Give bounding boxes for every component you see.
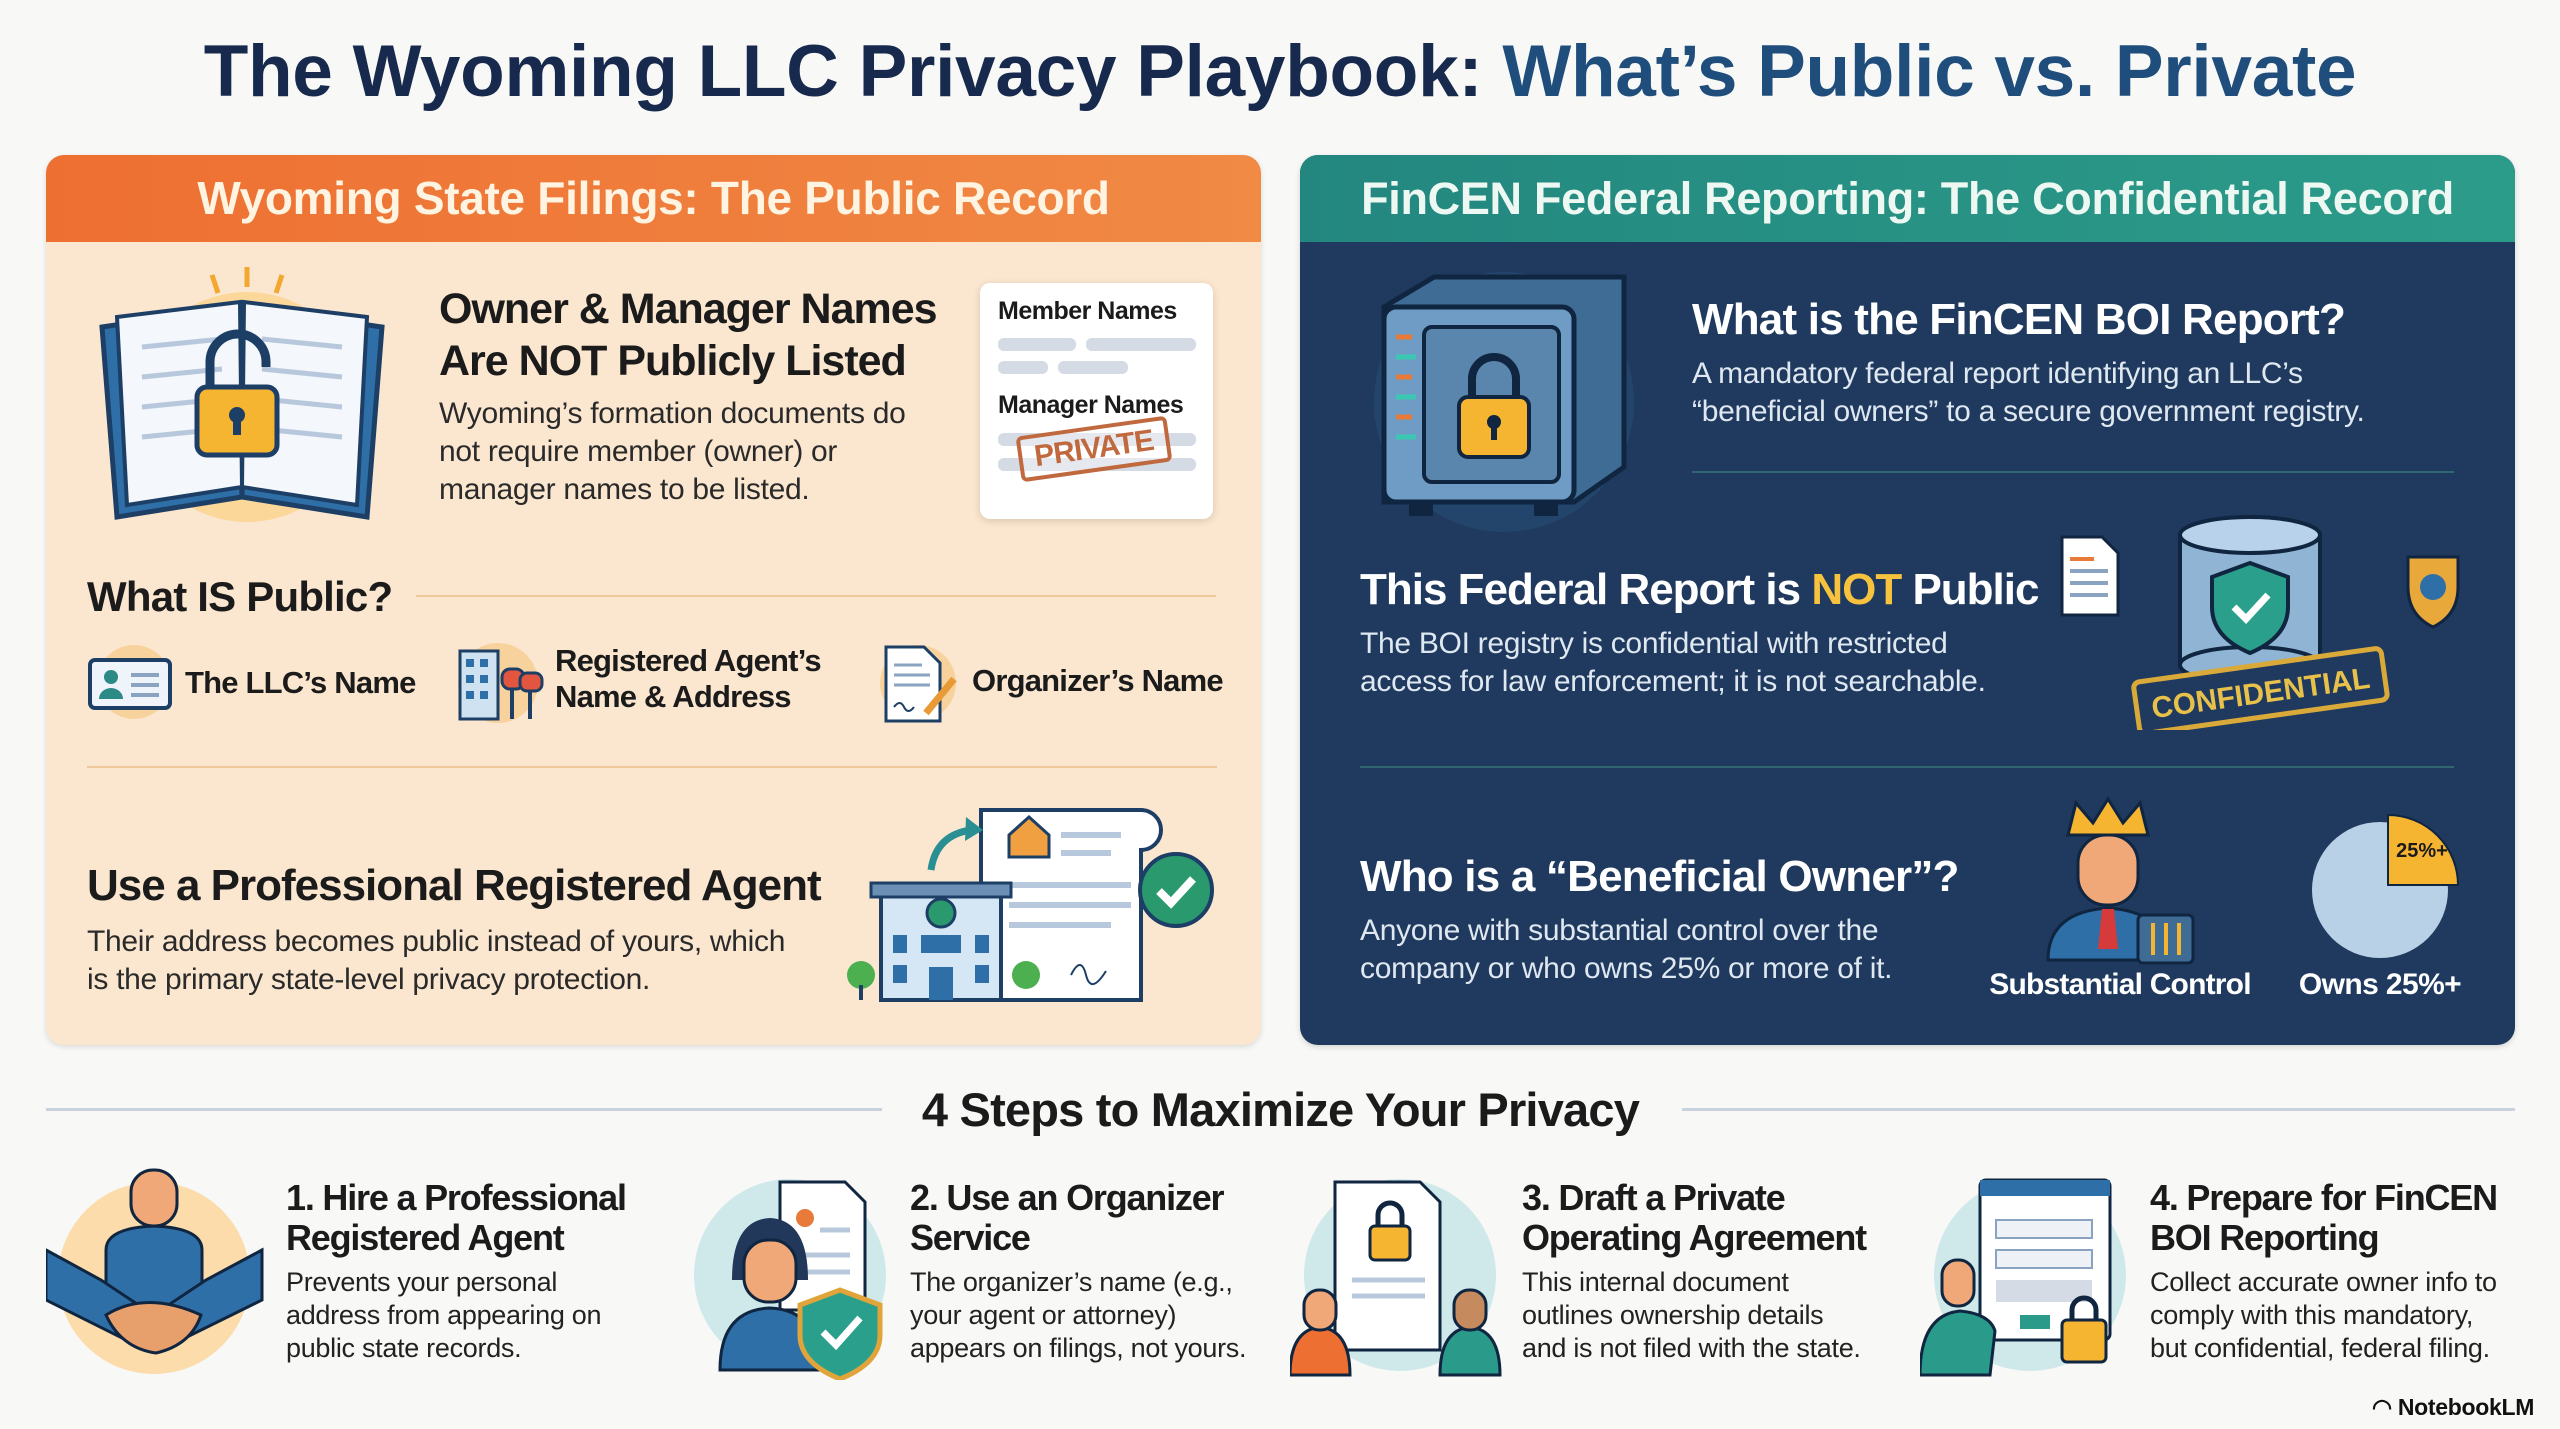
text: step 2: your agent or attorney) <box>910 1300 1176 1330</box>
heading: names not listed: Are NOT Publicly Listed <box>439 337 906 385</box>
text: registry confidential <box>1360 627 1986 698</box>
item: registered agent name and address: Name & Address <box>555 679 791 714</box>
text: agent address: is the primary state-level privacy protection. <box>87 963 650 996</box>
icon: substantial control person: Substantial Control <box>1989 968 2251 1001</box>
text: step 3: outlines ownership details <box>1522 1300 1823 1330</box>
card: private names: Manager Names <box>998 391 1183 419</box>
panel: Wyoming state filings <box>46 155 1261 1045</box>
step 2: organizer service <box>694 1177 1246 1380</box>
icon: confidential database <box>2060 515 2460 730</box>
stamp: private: PRIVATE <box>1032 424 1156 473</box>
text: step 3: 3. Draft a Private <box>1522 1177 1785 1218</box>
heading: what is public: What IS Public? <box>87 573 392 620</box>
text: beneficial owner definition: company or who owns 25% or more of it. <box>1360 952 1892 985</box>
heading: names not listed <box>439 285 937 385</box>
heading: beneficial owner: Who is a “Beneficial Owner”? <box>1360 852 1959 901</box>
text: step 2: appears on filings, not yours. <box>910 1333 1246 1363</box>
title: The Wyoming LLC Privacy Playbook: What’s Public vs. Private <box>204 31 2356 112</box>
panel header: confidential record <box>1300 155 2515 242</box>
icon: person with shield <box>694 1179 886 1380</box>
text: beneficial owner definition <box>1360 914 1892 985</box>
text: beneficial owner definition: Anyone with substantial control over the <box>1360 914 1878 947</box>
text: step 1: Registered Agent <box>286 1217 564 1258</box>
step 3: operating agreement <box>1290 1177 1867 1376</box>
text: BOI definition: “beneficial owners” to a secure government registry. <box>1692 395 2364 428</box>
text: step 1: 1. Hire a Professional <box>286 1177 626 1218</box>
text: step 1 <box>286 1177 626 1363</box>
icon: safe with lock <box>1374 272 1634 532</box>
text: step 4: but confidential, federal filing. <box>2150 1333 2490 1363</box>
item: organizer's name <box>880 645 1223 722</box>
item: LLC name <box>88 645 416 719</box>
icon: agent building and document <box>847 808 1214 1002</box>
text: step 2 <box>910 1177 1246 1363</box>
text: step 3: and is not filed with the state. <box>1522 1333 1861 1363</box>
icon: open book with lock <box>99 267 385 522</box>
text: formation documents: Wyoming’s formation documents do <box>439 397 905 430</box>
text: step 4: comply with this mandatory, <box>2150 1300 2473 1330</box>
stamp: private <box>1016 416 1172 482</box>
heading: 4 steps <box>46 1083 2515 1136</box>
text: step 3: Operating Agreement <box>1522 1217 1866 1258</box>
text: step 1: address from appearing on <box>286 1300 601 1330</box>
step 1: hire agent <box>46 1168 626 1374</box>
item: registered agent name and address: Registered Agent’s <box>555 643 821 678</box>
chart: owns 25% pie <box>2299 814 2461 1001</box>
icon: document with lock and two people <box>1290 1179 1502 1376</box>
icon: person at screen with lock <box>1920 1178 2126 1376</box>
text: registry confidential: access for law enforcement; it is not searchable. <box>1360 665 1986 698</box>
text: step 4 <box>2150 1177 2497 1363</box>
text: formation documents: not require member (owner) or <box>439 435 837 468</box>
logo: NotebookLM: ◠ NotebookLM <box>2372 1394 2534 1420</box>
heading: not public: This Federal Report is NOT Public <box>1360 565 2038 614</box>
panel header: confidential record: FinCEN Federal Reporting: The Confidential Record <box>1361 173 2454 224</box>
text: step 2: 2. Use an Organizer <box>910 1177 1223 1218</box>
text: step 4: BOI Reporting <box>2150 1217 2378 1258</box>
icon: confidential database: CONFIDENTIAL <box>2150 662 2372 725</box>
heading: use professional agent: Use a Professional Registered Agent <box>87 861 821 910</box>
heading: what is BOI report: What is the FinCEN BOI Report? <box>1692 295 2345 344</box>
card: private names: Member Names <box>998 297 1177 325</box>
text: BOI definition: A mandatory federal report identifying an LLC’s <box>1692 357 2303 390</box>
text: step 1: public state records. <box>286 1333 521 1363</box>
text: formation documents: manager names to be listed. <box>439 473 809 506</box>
item: organizer's name: Organizer’s Name <box>972 663 1223 698</box>
text: step 4: Collect accurate owner info to <box>2150 1267 2497 1297</box>
text: step 4: 4. Prepare for FinCEN <box>2150 1177 2497 1218</box>
text: step 1: Prevents your personal <box>286 1267 557 1297</box>
chart: owns 25% pie: 25%+ <box>2396 840 2448 862</box>
text: registry confidential: The BOI registry is confidential with restricted <box>1360 627 1948 660</box>
text: agent address <box>87 925 785 996</box>
text: formation documents <box>439 397 905 506</box>
text: BOI definition <box>1692 357 2364 428</box>
text: step 3 <box>1522 1177 1867 1363</box>
icon: handshake <box>46 1168 264 1374</box>
item: registered agent name and address <box>458 643 821 723</box>
text: step 2: Service <box>910 1217 1030 1258</box>
heading: names not listed: Owner & Manager Names <box>439 285 937 333</box>
panel: FinCEN federal reporting <box>1300 155 2515 1045</box>
step 4: prepare BOI <box>1920 1177 2497 1376</box>
icon: substantial control person <box>1989 796 2251 1001</box>
panel header: public record <box>46 155 1261 242</box>
chart: owns 25% pie: Owns 25%+ <box>2299 968 2461 1001</box>
item: LLC name: The LLC’s Name <box>185 665 416 700</box>
heading: 4 steps: 4 Steps to Maximize Your Privacy <box>922 1083 1639 1136</box>
text: step 3: This internal document <box>1522 1267 1789 1297</box>
panel header: public record: Wyoming State Filings: The Public Record <box>197 172 1110 224</box>
text: agent address: Their address becomes public instead of yours, which <box>87 925 785 958</box>
card: private names <box>980 283 1213 519</box>
text: step 2: The organizer’s name (e.g., <box>910 1267 1233 1297</box>
